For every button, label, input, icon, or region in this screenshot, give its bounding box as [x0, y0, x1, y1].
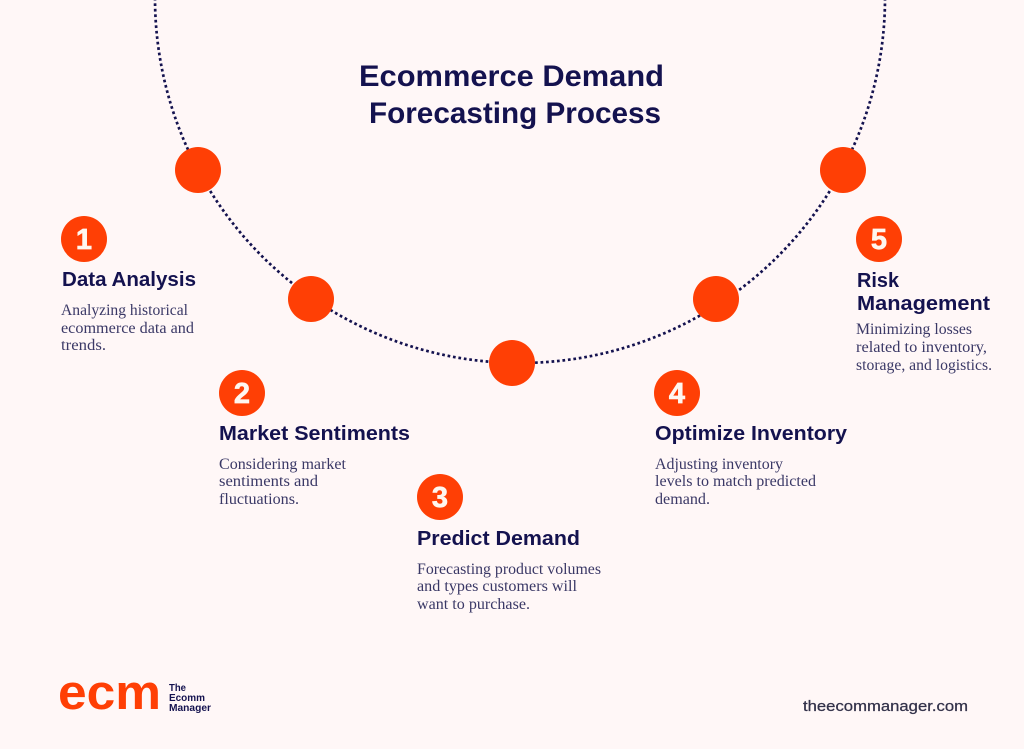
step 3: predict demand: want to purchase. — [417, 596, 530, 613]
step 1: data analysis: 1 — [76, 224, 92, 256]
step 2: market sentiments: fluctuations. — [219, 491, 299, 508]
step 5: risk management: Risk — [857, 270, 900, 292]
step 1: data analysis: Analyzing historical — [61, 302, 188, 319]
logo: ecm The Ecomm Manager: Manager — [169, 702, 211, 714]
step 3: predict demand: 3 — [432, 482, 448, 514]
website url: theecommanager.com — [803, 699, 968, 715]
step 5: risk management — [856, 216, 992, 374]
step 1: data analysis: ecommerce data and — [61, 320, 194, 337]
title: Forecasting Process — [369, 97, 661, 130]
step 2: market sentiments — [219, 370, 410, 508]
step 4: optimize inventory: Adjusting inventory — [655, 456, 783, 473]
step 5: risk management: 5 — [871, 224, 887, 256]
step 2: market sentiments: Considering market — [219, 456, 347, 473]
step 1: data analysis: trends. — [61, 337, 106, 354]
step 4: optimize inventory — [654, 370, 848, 508]
step 4: optimize inventory: demand. — [655, 491, 710, 508]
logo: ecm The Ecomm Manager: The — [169, 682, 186, 694]
step 4: optimize inventory: 4 — [669, 378, 685, 410]
step 4: optimize inventory: Optimize Inventory — [655, 423, 848, 445]
step 3: predict demand: Forecasting product volumes — [417, 561, 601, 578]
step 5: risk management: Management — [857, 293, 990, 315]
step 5: risk management: Minimizing losses — [856, 321, 972, 338]
step 3: predict demand: and types customers will — [417, 578, 577, 595]
dotted arc connecting the steps — [155, 0, 885, 363]
step 3: predict demand: Predict Demand — [417, 528, 580, 550]
arc node markers — [175, 147, 866, 386]
title: Ecommerce Demand — [359, 60, 664, 93]
step 4: optimize inventory: levels to match predicted — [655, 473, 816, 490]
step 1: data analysis: Data Analysis — [62, 269, 196, 291]
logo: ecm The Ecomm Manager: Ecomm — [169, 692, 205, 704]
step 3: predict demand — [417, 474, 601, 613]
step 5: risk management: storage, and logistics. — [856, 357, 992, 374]
step 2: market sentiments: sentiments and — [219, 473, 318, 490]
logo: ecm The Ecomm Manager — [58, 666, 211, 720]
title — [359, 60, 664, 130]
logo: ecm The Ecomm Manager: ecm — [58, 666, 161, 720]
step 2: market sentiments: 2 — [234, 378, 250, 410]
step 2: market sentiments: Market Sentiments — [219, 423, 410, 445]
step 1: data analysis — [61, 216, 196, 354]
step 5: risk management: related to inventory, — [856, 339, 987, 356]
